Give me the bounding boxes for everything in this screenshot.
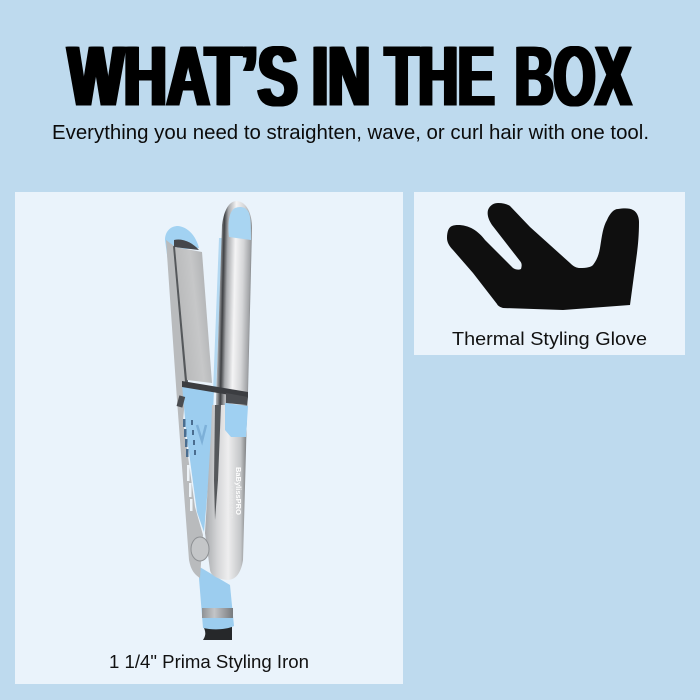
heating plate — [175, 247, 212, 383]
brand text: BaBylissPRO — [234, 467, 243, 515]
cord end — [203, 626, 232, 640]
title: IN — [312, 29, 370, 125]
handle band — [202, 608, 233, 618]
title: WHAT’S — [68, 29, 297, 125]
badge — [191, 537, 209, 561]
panel: glove — [414, 192, 685, 355]
title: THE — [385, 29, 494, 125]
clip — [226, 393, 248, 405]
panel: styling iron — [15, 192, 403, 684]
blue interior — [182, 384, 214, 532]
lock slider — [225, 403, 248, 437]
lower arm blue tip — [165, 226, 199, 262]
subtitle: Everything you need to straighten, wave, or curl hair with one tool. — [52, 122, 649, 144]
white switches — [187, 465, 192, 511]
lower arm shadow line — [173, 246, 188, 382]
lower arm dark cap — [174, 239, 199, 250]
lower arm silver strip — [166, 240, 203, 578]
side latch — [177, 395, 185, 408]
upper arm — [216, 201, 252, 440]
caption: glove: Thermal Styling Glove — [452, 328, 647, 349]
control buttons — [183, 419, 206, 457]
title: BOX — [515, 29, 631, 125]
hinge band — [182, 381, 248, 398]
upper arm blue cap — [229, 207, 251, 240]
icon: thermal glove — [447, 203, 639, 310]
caption: iron: 1 1/4" Prima Styling Iron — [109, 651, 309, 672]
upper arm edge strip — [213, 238, 222, 392]
title — [65, 29, 633, 125]
model text: PRIMA3000 — [227, 486, 233, 519]
lower body dark stripe — [214, 405, 221, 520]
icon: flat iron — [165, 201, 252, 640]
upper arm lower body — [205, 405, 247, 580]
handle — [198, 566, 234, 629]
